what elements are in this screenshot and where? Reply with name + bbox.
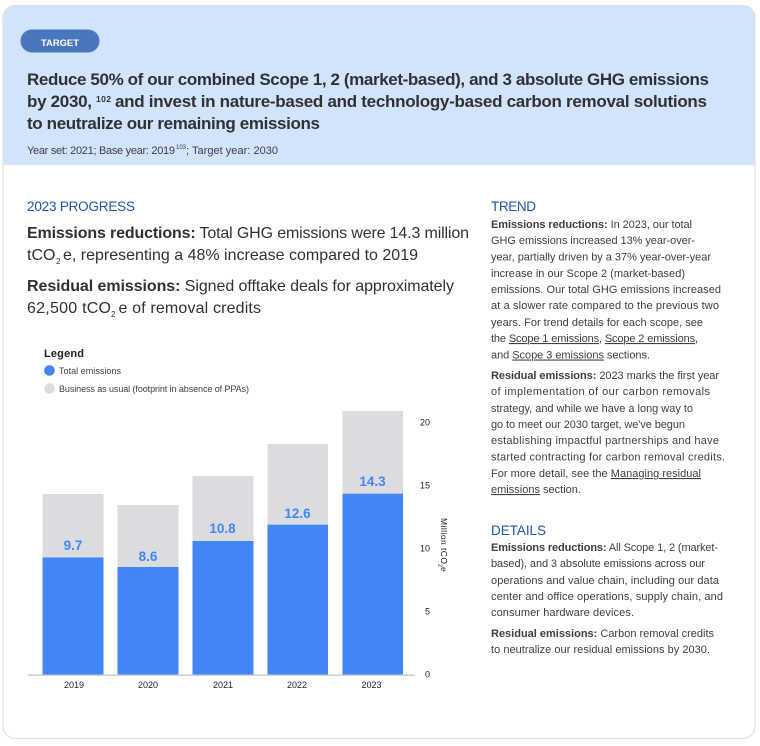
y axis labels: [420, 418, 430, 680]
trend: emissions reductions: GHG emissions increased 13% year-over-: [491, 235, 695, 247]
trend: residual emissions: emissions section.: [491, 484, 581, 496]
trend: emissions reductions: emissions. Our total GHG emissions increased: [491, 284, 721, 296]
trend: residual emissions: For more detail, see the Managing residual: [491, 468, 701, 480]
heading: [27, 70, 709, 133]
year set line: Year set: 2021; Base year: 2019: [27, 145, 175, 157]
trend: emissions reductions: years. For trend details for each scope, see: [491, 317, 703, 329]
year set line: [27, 145, 278, 157]
trend: residual emissions: [491, 370, 725, 496]
legend: [44, 348, 249, 394]
bar 2019: 9.7: [64, 538, 82, 553]
residual emissions statement: Residual emissions: Signed offtake deals for approximately: [27, 278, 454, 295]
y axis labels: 0: [425, 670, 430, 680]
trend: emissions reductions: year, partially driven by a 37% year-over-year: [491, 252, 711, 264]
emissions reductions statement: tCO: [27, 247, 55, 264]
target pill: [20, 30, 100, 52]
bar 2020: 8.6: [139, 549, 158, 564]
bar 2022: 12.6: [284, 506, 311, 521]
residual emissions statement: 62,500 tCO: [27, 300, 111, 317]
heading: and invest in nature-based and technology-based carbon removal solutions: [115, 92, 707, 111]
emissions reductions statement: Emissions reductions: Total GHG emissions were 14.3 million: [27, 225, 469, 242]
trend: emissions reductions: increase in our Scope 2 (market-based): [491, 268, 685, 280]
trend: residual emissions: go to meet our 2030 target, we've begun: [491, 419, 685, 431]
residual emissions statement: [27, 278, 454, 319]
emissions reductions statement: 2: [56, 257, 61, 266]
residual emissions statement: e of removal credits: [118, 300, 261, 317]
bar 2023: 14.3: [359, 474, 386, 489]
y axis labels: 15: [420, 480, 430, 490]
emissions reductions statement: [27, 225, 469, 266]
details: residual emissions: [491, 628, 714, 656]
legend: Total emissions: [59, 366, 122, 376]
panel: details: [491, 523, 723, 656]
y axis title: 2: [436, 564, 442, 567]
trend: residual emissions: strategy, and while we have a long way to: [491, 403, 693, 415]
bar 2019: 2019: [64, 680, 84, 690]
y axis title: [436, 518, 449, 572]
bar 2023: 2023: [361, 680, 382, 690]
legend: Legend: [44, 348, 84, 360]
details: emissions reductions: center and office operations, supply chain, and: [491, 591, 723, 603]
trend: emissions reductions: [491, 219, 721, 362]
bar 2022: [268, 444, 328, 690]
trend: residual emissions: of implementation of our carbon removals: [491, 386, 710, 398]
panel: 2023 progress: [27, 199, 469, 319]
bar 2020: [118, 505, 178, 690]
bar 2022: 2022: [287, 680, 307, 690]
year set line: 103: [176, 145, 187, 151]
progress heading: 2023 PROGRESS: [27, 199, 135, 214]
trend: residual emissions: started contracting for carbon removal credits.: [491, 452, 725, 464]
details heading: DETAILS: [491, 523, 546, 538]
trend: emissions reductions: and Scope 3 emissions sections.: [491, 350, 650, 362]
bar 2020: 2020: [138, 680, 158, 690]
details: emissions reductions: consumer hardware devices.: [491, 607, 634, 619]
details: residual emissions: to neutralize our residual emissions by 2030.: [491, 644, 710, 656]
trend: emissions reductions: at a slower rate compared to the previous two: [491, 300, 719, 312]
trend: emissions reductions: the Scope 1 emissions, Scope 2 emissions,: [491, 333, 698, 345]
legend: Business as usual (footprint in absence of PPAs): [59, 384, 249, 394]
details: residual emissions: Residual emissions: Carbon removal credits: [491, 628, 714, 640]
details: emissions reductions: [491, 542, 723, 619]
bar 2021: 10.8: [209, 521, 236, 536]
bar 2019: [42, 494, 104, 690]
y axis labels: 10: [420, 544, 430, 554]
bar 2021: [192, 476, 254, 690]
heading: Reduce 50% of our combined Scope 1, 2 (market-based), and 3 absolute GHG emissions: [27, 70, 709, 89]
bar 2023: [342, 411, 403, 690]
details: emissions reductions: Emissions reductions: All Scope 1, 2 (market-: [491, 542, 718, 554]
panel: target header: [3, 6, 755, 165]
trend: residual emissions: Residual emissions: 2023 marks the first year: [491, 370, 719, 382]
y axis title: Million tCO: [439, 518, 449, 564]
bar chart: [28, 411, 449, 690]
year set line: ; Target year: 2030: [186, 145, 278, 157]
trend: residual emissions: establishing impactful partnerships and have: [491, 435, 719, 447]
y axis labels: 5: [425, 606, 430, 616]
residual emissions statement: 2: [111, 310, 116, 319]
target pill: TARGET: [41, 38, 79, 49]
emissions reductions statement: e, representing a 48% increase compared to 2019: [63, 247, 418, 264]
heading: by 2030,: [27, 92, 92, 111]
trend: emissions reductions: Emissions reductions: In 2023, our total: [491, 219, 692, 231]
details: emissions reductions: operations and value chain, including our data: [491, 575, 720, 587]
bar 2021: 2021: [213, 680, 233, 690]
y axis labels: 20: [420, 418, 430, 428]
heading: to neutralize our remaining emissions: [27, 114, 320, 133]
heading: 102: [96, 94, 111, 104]
details: emissions reductions: based), and 3 absolute emissions across our: [491, 558, 705, 570]
y axis title: e: [439, 567, 449, 572]
trend heading: TREND: [491, 199, 536, 214]
panel: trend: [491, 199, 725, 496]
